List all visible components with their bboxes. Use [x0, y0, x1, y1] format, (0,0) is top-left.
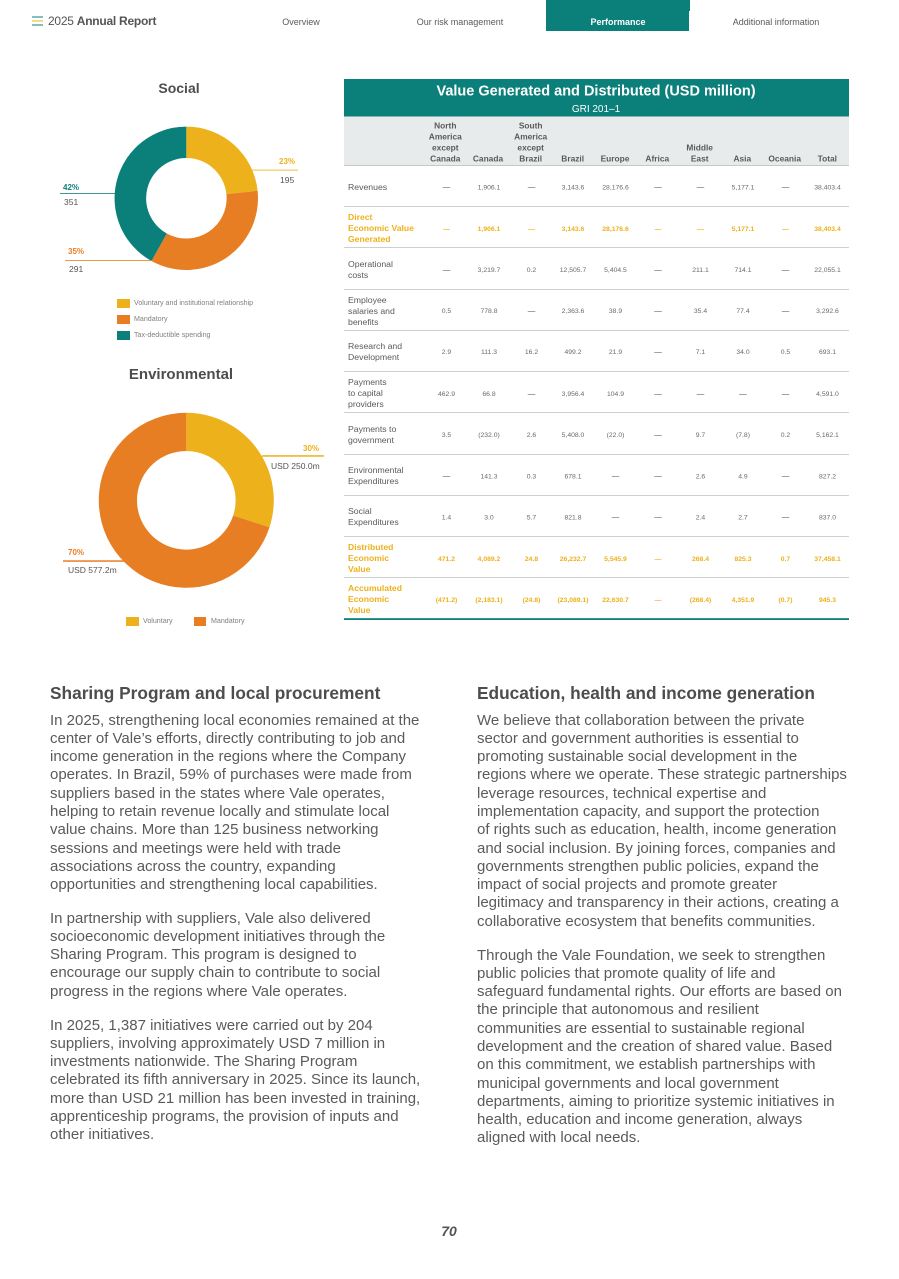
row: revenues: — — [654, 182, 662, 192]
row: environmental expenditures: 0.3 — [527, 474, 536, 480]
text: education paragraph 1: implementation capacity, and support the protection — [477, 803, 819, 820]
row: distributed economic value: 5,545.9 — [604, 556, 627, 563]
row: operational costs: 12,505.7 — [560, 267, 586, 274]
row: payments to government: 9.7 — [696, 432, 705, 439]
text: education paragraph 1: legitimacy and transparency in their actions, creating a — [477, 894, 839, 911]
nav: active tab performance — [546, 0, 689, 31]
table column headers: except — [432, 142, 459, 152]
row: payments to government: 5,162.1 — [816, 432, 839, 439]
legend: social: Voluntary and institutional relationship — [134, 299, 253, 307]
row: direct economic value generated: — — [443, 226, 450, 233]
text: sharing paragraph 3: investments nationwide. The Sharing Program — [50, 1053, 357, 1070]
row: operational costs: 714.1 — [734, 267, 752, 274]
text: education paragraph 2: communities are essential to sustainable regional — [477, 1020, 805, 1037]
text: education paragraph 1: impact of social projects and promote greater — [477, 876, 777, 893]
row: social expenditures: — — [782, 512, 790, 522]
callout: environmental 70%: USD 577.2m — [68, 565, 117, 575]
row: distributed economic value: 37,458.1 — [814, 556, 841, 563]
row: revenues: 38,403.4 — [814, 184, 841, 192]
row: payments to government — [344, 424, 849, 455]
row: employee salaries and benefits: 2,363.6 — [562, 308, 585, 315]
legend: environmental: Mandatory — [211, 617, 245, 625]
row: environmental expenditures: 2.6 — [696, 474, 705, 480]
nav: risk management: Our risk management — [417, 17, 503, 27]
row: operational costs: 0.2 — [527, 267, 536, 274]
callout: social 35% — [65, 247, 152, 274]
text: sharing paragraph 1: value chains. More than 125 business networking — [50, 821, 379, 838]
row: payments to capital providers: — — [528, 389, 536, 398]
nav: overview: Overview — [282, 17, 320, 27]
row: distributed economic value: Economic — [348, 553, 389, 563]
heading: education, health and income generation: Education, health and income generation — [477, 683, 815, 703]
table title banner: Value Generated and Distributed (USD million) — [436, 84, 756, 100]
icon: menu — [32, 16, 43, 26]
row: payments to government: (232.0) — [478, 432, 500, 439]
row: direct economic value generated: 1,906.1 — [478, 226, 501, 233]
row: accumulated economic value: (268.4) — [690, 597, 711, 604]
callout: environmental 70%: 70% — [68, 548, 84, 557]
row: employee salaries and benefits: — — [782, 306, 790, 315]
text: education paragraph 2: on this commitment, we establish partnerships with — [477, 1056, 815, 1073]
row: revenues: — — [443, 182, 451, 192]
row: employee salaries and benefits: 778.8 — [480, 308, 498, 315]
row: revenues — [344, 182, 849, 207]
text: sharing paragraph 3: other initiatives. — [50, 1126, 154, 1143]
row: direct economic value generated: Generated — [348, 234, 391, 244]
table column headers: Canada — [430, 154, 461, 164]
row: direct economic value generated: — — [782, 226, 789, 233]
row: distributed economic value: 26,232.7 — [560, 556, 586, 563]
row: revenues: — — [697, 182, 705, 192]
table column headers: Asia — [733, 154, 751, 164]
table column headers: Middle — [686, 142, 713, 152]
row: operational costs: — — [782, 265, 790, 274]
text: sharing paragraph 2: Sharing Program. This program is designed to — [50, 946, 357, 963]
row: payments to capital providers: — — [697, 389, 705, 398]
callout: environmental 70% — [63, 548, 126, 575]
text: education paragraph 2: public policies that promote quality of life and — [477, 965, 776, 982]
text: sharing paragraph 3: apprenticeship programs, the provision of inputs and — [50, 1108, 399, 1125]
table column headers: Europe — [601, 154, 630, 164]
row: social expenditures: 2.7 — [738, 514, 748, 522]
row: direct economic value generated: — — [528, 226, 535, 233]
text: sharing paragraph 1: sessions and meetings were held with trade — [50, 840, 341, 857]
row: environmental expenditures: 678.1 — [564, 474, 582, 480]
text: sharing paragraph 3: suppliers, involving approximately USD 7 million in — [50, 1035, 385, 1052]
row: social expenditures — [344, 506, 849, 537]
text: sharing paragraph 3 — [50, 1016, 420, 1143]
row: distributed economic value: Value — [348, 564, 371, 574]
row: research and development: 16.2 — [525, 349, 538, 356]
row: accumulated economic value: 945.3 — [819, 597, 836, 604]
report title: 2025 Annual Report — [48, 14, 156, 28]
table column headers: Brazil — [519, 154, 542, 164]
callout: environmental 30% — [262, 444, 324, 471]
row: social expenditures: — — [612, 512, 620, 522]
callout: social 42% — [60, 183, 115, 207]
row: distributed economic value: 471.2 — [438, 556, 455, 563]
legend: social: Tax-deductible spending — [134, 331, 211, 339]
text: education paragraph 1: sector and government authorities is essential to — [477, 730, 799, 747]
text: sharing paragraph 1: income generation in the regions where the Company — [50, 748, 406, 765]
table column headers: Canada — [473, 154, 503, 164]
row: environmental expenditures — [344, 465, 849, 496]
row: accumulated economic value: (24.8) — [523, 597, 540, 604]
chart: social donut — [115, 127, 258, 270]
text: sharing paragraph 3: celebrated its fifth anniversary in 2025. Since its launch, — [50, 1071, 420, 1088]
row: accumulated economic value: 22,630.7 — [602, 597, 629, 604]
row: payments to capital providers: — — [739, 389, 747, 398]
legend: social — [117, 299, 253, 340]
row: employee salaries and benefits: benefits — [348, 317, 379, 327]
callout: environmental 30%: USD 250.0m — [271, 461, 320, 471]
row: direct economic value generated: Economic Value — [348, 223, 414, 233]
row: distributed economic value — [344, 542, 849, 578]
text: education paragraph 1: of rights such as education, health, income generation — [477, 821, 836, 838]
row: revenues: — — [782, 182, 790, 192]
text: education paragraph 2: the principle that autonomous and resilient — [477, 1001, 759, 1018]
row: payments to government: government — [348, 435, 394, 445]
row: environmental expenditures: — — [782, 472, 790, 480]
row: revenues: 28,176.6 — [602, 184, 629, 192]
row: payments to government: 5,408.0 — [562, 432, 585, 439]
row: research and development: 693.1 — [819, 349, 836, 356]
row: environmental expenditures: 4.9 — [738, 474, 748, 480]
table column headers: North — [434, 120, 456, 130]
page number: 70 — [441, 1223, 457, 1239]
row: research and development — [344, 341, 849, 372]
table column headers: America — [514, 132, 548, 142]
text: education paragraph 2: aligned with local needs. — [477, 1129, 640, 1146]
row: research and development: — — [654, 347, 662, 356]
text: sharing paragraph 3: more than USD 21 million has been invested in training, — [50, 1090, 420, 1107]
row: accumulated economic value: (0.7) — [779, 597, 792, 604]
row: environmental expenditures: Environmental — [348, 465, 404, 475]
text: education paragraph 1 — [477, 712, 847, 930]
text: education paragraph 2: health, education and income generation, always — [477, 1111, 802, 1128]
row: employee salaries and benefits: 77.4 — [736, 308, 750, 315]
row: employee salaries and benefits: 38.9 — [609, 308, 622, 315]
legend: environmental — [126, 617, 245, 626]
row: accumulated economic value: — — [655, 597, 662, 604]
row: payments to capital providers: 104.9 — [607, 391, 624, 398]
text: education paragraph 2: development and the creation of shared value. Based — [477, 1038, 832, 1055]
row: payments to government: 2.6 — [527, 432, 536, 439]
table column headers: East — [691, 154, 709, 164]
row: distributed economic value: — — [655, 556, 662, 563]
text: education paragraph 2: departments, aiming to prioritize systemic initiatives in — [477, 1093, 835, 1110]
row: employee salaries and benefits: 3,292.6 — [816, 308, 839, 315]
row: operational costs: costs — [348, 270, 369, 280]
row: operational costs: Operational — [348, 259, 393, 269]
callout: social 35%: 291 — [69, 264, 83, 274]
table title banner — [344, 79, 849, 116]
row: revenues: 3,143.6 — [562, 184, 585, 192]
row: payments to capital providers: 462.9 — [438, 391, 455, 398]
row: payments to capital providers: providers — [348, 399, 384, 409]
text: sharing paragraph 1: In 2025, strengthening local economies remained at the — [50, 712, 419, 728]
row: payments to capital providers: 4,591.0 — [816, 391, 839, 398]
row: revenues: Revenues — [348, 182, 388, 192]
row: social expenditures: — — [654, 512, 662, 522]
callout: social 23% — [252, 157, 298, 185]
table column headers: Total — [818, 154, 837, 164]
row: payments to government: Payments to — [348, 424, 396, 434]
text: sharing paragraph 1: suppliers based in the states where Vale operates, — [50, 785, 385, 802]
header bar — [32, 0, 819, 31]
row: distributed economic value: 825.3 — [734, 556, 752, 563]
text: sharing paragraph 2: progress in the regions where Vale operates. — [50, 983, 347, 1000]
row: operational costs: 3,219.7 — [478, 267, 501, 274]
row: operational costs: 22,055.1 — [814, 267, 841, 274]
row: payments to government: 3.5 — [442, 432, 451, 439]
row: accumulated economic value: Value — [348, 605, 371, 615]
row: payments to government: (22.0) — [607, 432, 624, 439]
text: education paragraph 1: collaborative ecosystem that benefits communities. — [477, 913, 816, 930]
row: accumulated economic value — [344, 583, 849, 620]
text: education paragraph 2: safeguard fundamental rights. Our efforts are based on — [477, 983, 842, 1000]
text: sharing paragraph 2: encourage our supply chain to contribute to social — [50, 964, 380, 981]
row: environmental expenditures: — — [443, 472, 451, 480]
text: sharing paragraph 2 — [50, 910, 385, 1000]
row: operational costs: 211.1 — [692, 267, 709, 274]
text: sharing paragraph 2: socioeconomic development initiatives through the — [50, 928, 385, 945]
text: sharing paragraph 1: center of Vale’s efforts, directly contributing to job and — [50, 730, 405, 747]
text: education paragraph 2 — [477, 946, 842, 1146]
row: payments to government: 0.2 — [781, 432, 790, 439]
text: sharing paragraph 1: helping to retain revenue locally and stimulate local — [50, 803, 389, 820]
callout: social 42%: 42% — [63, 183, 79, 192]
row: distributed economic value: 268.4 — [692, 556, 709, 563]
text: education paragraph 1: leverage resources, technical expertise and — [477, 785, 766, 802]
table column headers: Africa — [645, 154, 670, 164]
table title banner: GRI 201–1 — [572, 104, 621, 115]
row: environmental expenditures: Expenditures — [348, 476, 399, 486]
row: research and development: Research and — [348, 341, 402, 351]
row: employee salaries and benefits: 0.5 — [442, 308, 451, 315]
row: direct economic value generated: 38,403.4 — [814, 226, 841, 233]
table column headers — [344, 116, 849, 166]
row: employee salaries and benefits: 35.4 — [694, 308, 707, 315]
row: research and development: 2.9 — [442, 349, 451, 356]
row: revenues: 1,906.1 — [478, 184, 501, 192]
row: distributed economic value: 0.7 — [781, 556, 790, 563]
row: social expenditures: Social — [348, 506, 372, 516]
row: payments to capital providers: — — [654, 389, 662, 398]
legend: social: Mandatory — [134, 315, 168, 323]
table column headers: Oceania — [768, 154, 801, 164]
text: education paragraph 2: Through the Vale Foundation, we seek to strengthen — [477, 946, 825, 964]
row: research and development: 21.9 — [609, 349, 622, 356]
text: education paragraph 1: regions where we operate. These strategic partnerships — [477, 766, 847, 783]
row: research and development: 499.2 — [564, 349, 582, 356]
callout: social 23%: 195 — [280, 175, 294, 185]
legend: environmental: Voluntary — [143, 617, 173, 625]
row: environmental expenditures: — — [612, 472, 620, 480]
row: payments to capital providers: 66.8 — [482, 391, 496, 398]
row: payments to capital providers — [344, 377, 849, 413]
heading: sharing program: Sharing Program and local procurement — [50, 683, 380, 703]
row: direct economic value generated: Direct — [348, 212, 372, 222]
row: accumulated economic value: (2,183.1) — [475, 597, 503, 604]
text: education paragraph 1: We believe that collaboration between the private — [477, 712, 804, 728]
row: social expenditures: 2.4 — [696, 514, 705, 522]
row: environmental expenditures: 141.3 — [480, 474, 498, 480]
row: payments to capital providers: to capital — [348, 388, 383, 398]
row: social expenditures: 1.4 — [442, 514, 451, 522]
row: operational costs: — — [654, 265, 662, 274]
text: sharing paragraph 1: associations across the country, expanding — [50, 858, 336, 875]
text: education paragraph 1: promoting sustainable social development in the — [477, 748, 797, 765]
row: environmental expenditures: 827.2 — [819, 474, 836, 480]
text: education paragraph 2: municipal governments and local government — [477, 1075, 779, 1092]
callout: social 35%: 35% — [68, 247, 84, 256]
row: employee salaries and benefits: Employee — [348, 295, 387, 305]
row: employee salaries and benefits: — — [528, 306, 536, 315]
row: direct economic value generated: — — [655, 226, 662, 233]
row: operational costs: 5,404.5 — [604, 267, 627, 274]
heading: social: Social — [158, 80, 200, 96]
row: operational costs: — — [443, 265, 451, 274]
row: research and development: Development — [348, 352, 400, 362]
row: social expenditures: 821.8 — [564, 514, 582, 522]
callout: social 23%: 23% — [279, 157, 295, 166]
row: distributed economic value: 24.8 — [525, 556, 538, 563]
table column headers: Brazil — [561, 154, 584, 164]
row: direct economic value generated: — — [697, 226, 704, 233]
text: sharing paragraph 3: In 2025, 1,387 initiatives were carried out by 204 — [50, 1016, 373, 1034]
row: direct economic value generated: 5,177.1 — [732, 226, 755, 233]
row: employee salaries and benefits: salaries and — [348, 306, 395, 316]
text: education paragraph 1: governments strengthen public policies, expand the — [477, 858, 819, 875]
row: research and development: 111.3 — [481, 349, 497, 356]
row: social expenditures: 3.0 — [484, 514, 494, 522]
row: accumulated economic value: (471.2) — [436, 597, 457, 604]
row: payments to capital providers: — — [782, 389, 790, 398]
row: research and development: 0.5 — [781, 349, 790, 356]
text: education paragraph 1: and social inclusion. By joining forces, companies and — [477, 840, 836, 857]
text: sharing paragraph 1: opportunities and strengthening local capabilities. — [50, 876, 378, 893]
text: sharing paragraph 2: In partnership with suppliers, Vale also delivered — [50, 910, 371, 926]
row: distributed economic value: 4,089.2 — [478, 556, 501, 563]
callout: social 42%: 351 — [64, 197, 78, 207]
heading: environmental: Environmental — [129, 366, 233, 383]
row: direct economic value generated — [344, 212, 849, 248]
table column headers: South — [519, 120, 543, 130]
row: accumulated economic value: 4,351.9 — [732, 597, 755, 604]
row: payments to capital providers: 3,956.4 — [562, 391, 585, 398]
row: social expenditures: Expenditures — [348, 517, 399, 527]
row: employee salaries and benefits — [344, 295, 849, 331]
row: revenues: — — [528, 182, 536, 192]
text: sharing paragraph 1: operates. In Brazil, 59% of purchases were made from — [50, 766, 412, 783]
row: payments to capital providers: Payments — [348, 377, 387, 387]
nav: additional information: Additional information — [733, 17, 819, 27]
row: accumulated economic value: Accumulated — [348, 583, 402, 593]
row: payments to government: (7.8) — [736, 432, 750, 439]
chart: environmental donut — [99, 413, 274, 588]
row: payments to government: — — [654, 430, 662, 439]
row: revenues: 5,177.1 — [732, 184, 755, 192]
row: accumulated economic value: (23,089.1) — [558, 597, 588, 604]
row: research and development: 7.1 — [696, 349, 705, 356]
row: accumulated economic value: Economic — [348, 594, 389, 604]
text: sharing paragraph 1 — [50, 712, 419, 893]
row: social expenditures: 837.0 — [819, 514, 836, 522]
row: operational costs — [344, 259, 849, 290]
nav: performance: Performance — [590, 17, 646, 27]
row: direct economic value generated: 28,176.6 — [602, 226, 629, 233]
table column headers: except — [517, 142, 544, 152]
row: research and development: 34.0 — [736, 349, 750, 356]
table column headers: America — [429, 132, 462, 142]
row: employee salaries and benefits: — — [654, 306, 662, 315]
row: environmental expenditures: — — [654, 472, 662, 480]
row: direct economic value generated: 3,143.6 — [562, 226, 585, 233]
row: distributed economic value: Distributed — [348, 542, 393, 552]
row: social expenditures: 5.7 — [527, 514, 536, 522]
callout: environmental 30%: 30% — [303, 444, 319, 453]
